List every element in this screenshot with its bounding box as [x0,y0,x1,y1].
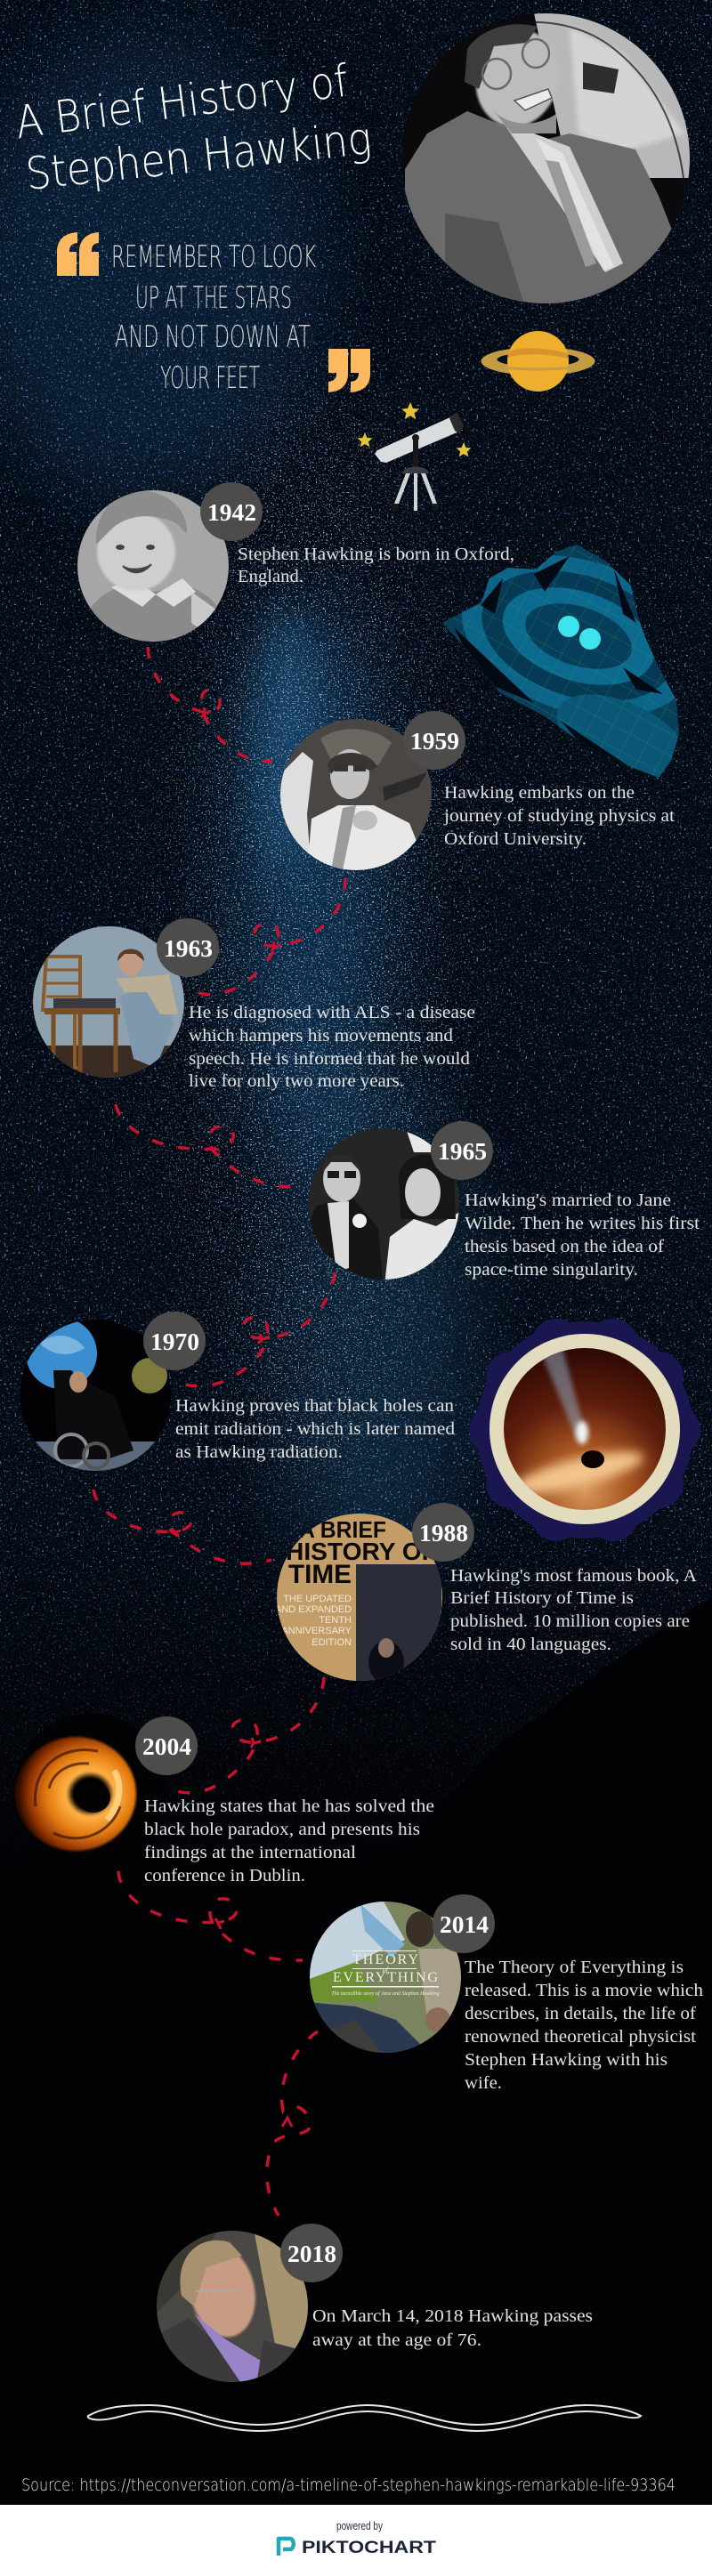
timeline: dashed red path with loops [93,647,345,2216]
text: 2004: Hawking states that he has solved the [144,1797,434,1816]
text: 1959: journey of studying physics at [443,806,675,826]
text: 1959: Hawking embarks on the [444,783,635,803]
event 1963 [31,918,475,1091]
text: 1959: Oxford University. [444,829,587,849]
illustration: glowing orange black hole [15,1713,166,1864]
illustration: gravitational wave ripple [442,545,679,778]
text: 1988: sold in 40 languages. [450,1635,611,1654]
badge: 1959: 1959 [410,728,459,755]
event 1988 [275,1503,698,1684]
event 2018 [156,2224,593,2385]
text: 1988: published. 10 million copies are [450,1611,690,1631]
photo: book cover A Brief History of Time: TENTH [319,1615,352,1626]
badge: 2014 [433,1894,495,1953]
photo: The Theory of Everything poster: The incredible story of Jane and Stephen Hawking [331,1991,440,1997]
text: 1963: which hampers his movements and [189,1026,453,1046]
text: 1988 [450,1566,698,1654]
text: 1965 [465,1191,700,1280]
text: 1942: Stephen Hawking is born in Oxford, [238,545,514,564]
text: 1988: Hawking's most famous book, A [450,1566,698,1586]
title: Stephen Hawking [23,112,374,200]
text: 1988: Brief History of Time is [450,1588,634,1608]
text: 1970: emit radiation - which is later named [175,1419,455,1439]
icon: closing quotation mark [328,349,370,392]
text: 1965: thesis based on the idea of [465,1237,664,1256]
badge: 1942: 1942 [207,499,256,526]
photo: student Hawking [280,716,432,876]
photo: The Theory of Everything poster: EVERYTHING [333,1970,438,1985]
text: 2014 [465,1958,703,2093]
badge: 1942 [200,482,263,541]
photo: The Theory of Everything poster: THEORY [352,1952,418,1967]
text: 2018: On March 14, 2018 Hawking passes [312,2306,593,2326]
text: 1963 [189,1003,475,1091]
icon: saturn [481,331,595,392]
badge: 1988 [412,1503,474,1562]
icon: opening quotation mark [57,232,99,276]
photo: book cover A Brief History of Time: A BRIEF [299,1516,386,1543]
text: 1965: Wilde. Then he writes his first [465,1214,700,1233]
text: 2004 [144,1797,434,1886]
badge: 1970: 1970 [150,1328,199,1355]
footer: powered by Piktochart [0,2505,712,2576]
photo: Hawking with planets [18,1317,174,1473]
text: 2014: released. This is a movie which [465,1981,703,2000]
photo: book cover A Brief History of Time: HISTORY OF [286,1538,437,1565]
title [12,55,374,200]
quote text: AND NOT DOWN AT [115,319,311,355]
text: 1965: Hawking's married to Jane [465,1191,671,1210]
text: 1959 [443,783,675,849]
wave divider [88,2405,641,2431]
footer: powered by Piktochart: powered by [336,2519,383,2532]
photo: book cover A Brief History of Time: ANNIVERSARY [281,1626,352,1636]
text: 1965: space-time singularity. [465,1260,638,1280]
badge: 2018 [280,2224,343,2282]
photo: book cover A Brief History of Time: AND EXPANDED [275,1604,352,1615]
title: A Brief History of [12,55,352,149]
event 1959 [280,711,675,876]
event 1942 [76,482,514,645]
quote text: YOUR FEET [160,360,260,396]
event 2004 [15,1713,434,1886]
text: 1963: live for only two more years. [189,1071,404,1091]
badge: 2004 [135,1716,198,1775]
text: 1963: speech. He is informed that he would [189,1049,470,1069]
text: 1970: Hawking proves that black holes can [175,1396,454,1416]
photo: wedding with Jane Wilde [307,1126,463,1286]
event 1970 [18,1312,455,1473]
photo: The Theory of Everything poster: of [383,1966,390,1974]
portrait: Stephen Hawking at top [400,13,694,307]
footer: powered by Piktochart: PIKTOCHART [302,2539,436,2557]
text: 1970 [175,1396,455,1462]
text: 2004: conference in Dublin. [144,1866,305,1886]
badge: 1963: 1963 [164,935,213,962]
text: 2014: The Theory of Everything is [465,1958,684,1977]
text: 1970: as Hawking radiation. [175,1442,343,1462]
text: 1963: He is diagnosed with ALS - a disease [189,1003,475,1022]
quote text: REMEMBER TO LOOK [111,239,316,275]
badge: 1965: 1965 [438,1138,487,1165]
text: 2014: Stephen Hawking with his [465,2050,668,2070]
photo: The Theory of Everything poster [307,1900,463,2055]
photo: baby Stephen [76,489,231,645]
text: 2018: away at the age of 76. [312,2330,481,2350]
photo: book cover A Brief History of Time [275,1513,445,1684]
badge: 2018: 2018 [287,2241,336,2267]
photo: book cover A Brief History of Time: THE UPDATED [283,1594,352,1604]
event 2014 [307,1894,703,2093]
photo: elderly Hawking [156,2229,312,2385]
badge: 1959 [403,711,465,770]
badge: 1965 [431,1121,493,1180]
text: 2018 [312,2306,593,2350]
badge: 2014: 2014 [440,1911,489,1938]
text: 2014: renowned theoretical physicist [465,2027,696,2047]
text: 2014: wife. [465,2073,502,2093]
badge: 2004: 2004 [142,1733,191,1760]
text: 2004: findings at the international [144,1843,356,1862]
badge: 1970 [143,1312,206,1370]
text: 1942: England. [238,567,303,586]
photo: Hawking with chair and chessboard [31,925,187,1081]
text: 1942 [238,545,514,586]
illustration: black hole badge [469,1319,700,1541]
quote text: UP AT THE STARS [135,280,292,316]
background: starry night sky [0,0,712,1861]
text: 2004: black hole paradox, and presents his [144,1820,420,1839]
icon: telescope with stars [358,402,472,515]
photo: book cover A Brief History of Time: TIME [288,1560,352,1589]
quote text [111,239,316,396]
photo: book cover A Brief History of Time: EDITION [312,1637,352,1648]
event 1965 [307,1121,700,1286]
badge: 1988: 1988 [419,1520,468,1546]
badge: 1963 [157,918,219,977]
text: 2014: describes, in details, the life of [465,2004,696,2023]
